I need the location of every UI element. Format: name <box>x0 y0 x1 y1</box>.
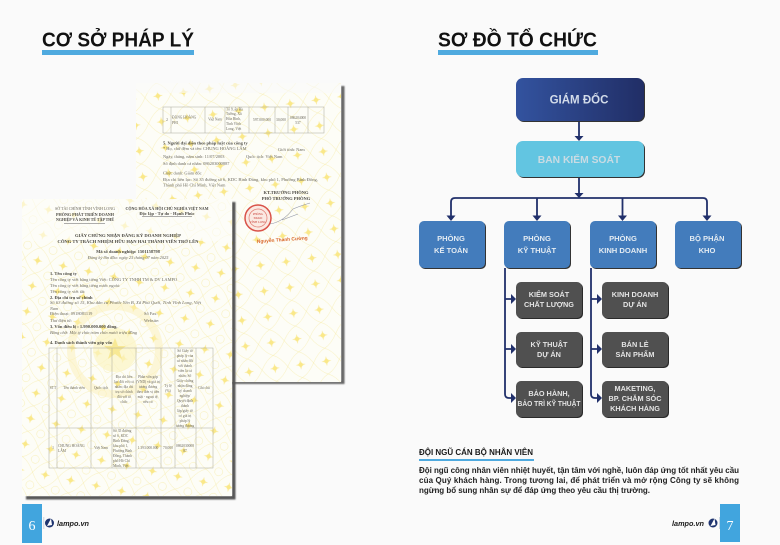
heading: ĐỘI NGŨ CÁN BỘ NHÂN VIÊN <box>419 448 534 461</box>
certificate member table: đối với tổ <box>117 394 131 399</box>
box: BAN KIỂM SOÁT: BAN KIỂM SOÁT <box>538 153 621 166</box>
back page signature block: PHÓ TRƯỞNG PHÒNG <box>262 196 311 201</box>
certificate title: GIẤY CHỨNG NHẬN ĐĂNG KÝ DOANH NGHIỆP <box>75 233 181 238</box>
box: KIỂM SOÁT CHẤT LƯỢNG: KIỂM SOÁT <box>529 290 570 299</box>
box: PHÒNG KINH DOANH <box>590 221 657 269</box>
certificate member table: 1.393.000.000 <box>138 446 159 450</box>
back page signature block: KT.TRƯỞNG PHÒNG <box>264 190 309 195</box>
certificate body text <box>49 271 202 345</box>
front page header: PHÒNG PHÁT TRIỂN DOANH <box>56 212 114 217</box>
certificate member table: tương đương <box>176 424 194 428</box>
footer left: logo and website: lampo.vn <box>57 519 89 528</box>
certificate member table: LÂM <box>58 448 67 453</box>
box: KIỂM SOÁT CHẤT LƯỢNG <box>516 282 583 319</box>
certificate member table: nhân; địa chỉ <box>115 385 133 389</box>
certificate member table: pháp lý <box>180 419 191 423</box>
certificate member table: Tên thành viên <box>63 386 85 390</box>
back page member table: ĐẶNG HOÀNG <box>172 114 197 120</box>
certificate member table: Đông, Thành <box>113 454 132 459</box>
certificate member table: theo đơn vị tiền <box>137 390 159 394</box>
certificate member table: Số Giấy tờ <box>177 349 193 353</box>
back page legal representative text: Thành phố Hồ Chí Minh, Việt Nam <box>163 182 226 188</box>
heading: ĐỘI NGŨ CÁN BỘ NHÂN VIÊN: ĐỘI NGŨ CÁN BỘ NHÂN VIÊN <box>419 448 533 457</box>
back page member table: PHI <box>172 121 179 125</box>
back page member table: 537 <box>295 121 301 125</box>
certificate member table: 70,000 <box>163 446 173 451</box>
box: BỘ PHẬN KHO <box>675 221 742 269</box>
certificate member table: số 6, KDC <box>113 434 129 439</box>
certificate title: Mã số doanh nghiệp: 1501158798 <box>96 249 161 254</box>
certificate member table: ký doanh <box>178 389 192 393</box>
box: KỸ THUẬT DỰ ÁN <box>516 332 583 368</box>
certificate member table: với thành <box>178 364 192 368</box>
certificate body text: Tên công ty viết bằng tiếng nước ngoài: <box>50 283 120 288</box>
certificate member table: Phần vốn góp <box>138 375 158 379</box>
title: CƠ SỞ PHÁP LÝ: CƠ SỞ PHÁP LÝ <box>42 28 195 52</box>
certificate title: Đăng ký lần đầu: ngày 25 tháng 07 năm 2025 <box>87 255 169 260</box>
front page header: CỘNG HÒA XÃ HỘI CHỦ NGHĨA VIỆT NAM <box>126 206 209 211</box>
certificate member table: thành <box>181 404 189 408</box>
text block: staff description <box>419 466 739 495</box>
certificate title: CÔNG TY TRÁCH NHIỆM HỮU HẠN HAI THÀNH VIÊN TRỞ LÊN <box>58 239 199 244</box>
certificate member table: Địa chỉ liên <box>116 375 133 379</box>
footer right: page number 7 <box>720 504 740 542</box>
certificate member table: CHUNG HOÀNG <box>58 443 85 448</box>
certificate member table: 1 <box>52 446 54 450</box>
box: GIÁM ĐỐC: GIÁM ĐỐC <box>550 92 608 106</box>
certificate member table: Số 35 đường <box>113 429 132 433</box>
box: MAKETING, BP. CHĂM SÓC KHÁCH HÀNG <box>602 381 669 418</box>
back page legal representative text: Giới tính: Nam <box>278 147 305 152</box>
title: SƠ ĐỒ TỔ CHỨC: SƠ ĐỒ TỔ CHỨC <box>438 28 597 52</box>
back page legal representative text: Chức danh: Giám đốc <box>163 170 202 176</box>
certificate body text: Tên công ty viết bằng tiếng Việt: CÔNG TY TNHH TM & DV LAMPO <box>50 277 177 282</box>
certificate body text: 1. Tên công ty <box>50 271 78 276</box>
footer right: website and logo: lampo.vn <box>672 519 704 528</box>
red stamp and signature: Nguyễn Thanh Cường <box>257 234 308 245</box>
certificate body text: Thư điện tử: <box>50 318 72 323</box>
certificate member table: 87 <box>183 449 187 453</box>
box: BÁN LẺ SẢN PHẨM <box>602 332 669 368</box>
front page header <box>55 206 209 224</box>
certificate member table: nhân; Số <box>179 374 192 378</box>
box: BÁN LẺ SẢN PHẨM: SẢN PHẨM <box>616 350 654 359</box>
box: GIÁM ĐỐC <box>516 78 645 122</box>
certificate member table: nếu có <box>143 400 153 404</box>
back page member table <box>163 106 324 133</box>
certificate member table: viên là cá <box>178 369 192 373</box>
back page member table: Tỉnh Vĩnh <box>226 122 241 126</box>
text block: staff description: Đội ngũ công nhân viên nhiệt huyết, tận tâm với nghề, luôn đáp ứng tốt nhất yêu cầu <box>419 466 739 475</box>
back page legal representative text: Quốc tịch: Việt Nam <box>246 154 283 159</box>
text block: staff description: của Quý khách hàng. Trong tương lai, để phát triển và mở rộng Công ty sẽ không <box>419 476 739 485</box>
connector: director to supervisory board <box>574 121 584 141</box>
certificate member table: tương đương <box>139 385 157 389</box>
certificate body text: Nam <box>49 306 58 311</box>
box: PHÒNG KỸ THUẬT <box>504 221 571 269</box>
national emblem sunburst <box>71 306 159 394</box>
certificate body text: 2. Địa chỉ trụ sở chính <box>50 295 93 300</box>
front page header: SỞ TÀI CHÍNH TỈNH VĨNH LONG <box>55 206 116 211</box>
box: BẢO HÀNH, BẢO TRÌ KỸ THUẬT <box>516 381 583 418</box>
back page member table: 30,000 <box>276 118 286 123</box>
certificate member table: STT <box>50 386 57 390</box>
red stamp and signature: PHÒNG <box>253 211 264 216</box>
box: PHÒNG KINH DOANH: PHÒNG <box>609 234 637 243</box>
box: KỸ THUẬT DỰ ÁN: DỰ ÁN <box>537 350 561 359</box>
back page legal representative text <box>163 140 318 188</box>
back page legal representative text: Ngày, tháng, năm sinh: 11/07/2003 <box>163 154 225 160</box>
certificate member table: lạc đối với cá <box>114 380 134 384</box>
back page legal representative text: Địa chỉ liên lạc: Số 35 đường số 6, KDC Bình Đăng, khu phố 1, Phường Bình Đông, <box>163 177 318 183</box>
box: MAKETING, BP. CHĂM SÓC KHÁCH HÀNG: KHÁCH HÀNG <box>610 404 660 413</box>
box: BỘ PHẬN KHO: BỘ PHẬN <box>689 234 725 243</box>
box: BAN KIỂM SOÁT <box>516 141 645 178</box>
back page member table: Việt Nam <box>208 118 222 122</box>
certificate member table: Quyết định <box>177 399 193 403</box>
box: PHÒNG KẾ TOÁN: PHÒNG <box>437 234 465 243</box>
back page member table: Tổ 9, ấp Bà <box>226 106 243 112</box>
certificate member table: phố Hồ Chí <box>113 459 130 463</box>
certificate member table: Tỷ lệ <box>164 384 172 388</box>
box: MAKETING, BP. CHĂM SÓC KHÁCH HÀNG: MAKETING, <box>615 384 655 393</box>
certificate member table: Phường Bình <box>113 449 132 453</box>
certificate member table: Ghi chú <box>198 386 210 390</box>
back page legal representative text: * Họ, chữ đệm và tên: CHUNG HOÀNG LÂM <box>163 146 247 152</box>
box: MAKETING, BP. CHĂM SÓC KHÁCH HÀNG: BP. CHĂM SÓC <box>609 394 662 403</box>
certificate member table: Bình Đăng, <box>113 439 130 444</box>
certificate member table: (VND) và giá trị <box>136 380 160 384</box>
certificate member table: Quốc tịch <box>94 386 108 390</box>
certificate body text: Bằng chữ: Một tỷ chín trăm chín mươi triệu đồng <box>50 330 138 335</box>
box: BẢO HÀNH, BẢO TRÌ KỸ THUẬT: BẢO HÀNH, <box>528 389 570 398</box>
certificate member table: (%) <box>165 389 171 393</box>
footer left: page number 6: 6 <box>28 519 36 534</box>
document: front page of business registration certificate <box>22 199 236 500</box>
certificate member table: khu phố 1, <box>113 444 128 449</box>
certificate member table: 0862030008 <box>176 444 194 448</box>
certificate body text: Tên công ty viết tắt: <box>50 289 85 294</box>
footer right: page number 7: 7 <box>726 519 734 534</box>
certificate body text: Số 63 đường số 15, Khu dân cư Phước Yên B, Xã Phú Quới, Tỉnh Vĩnh Long, Việt <box>50 300 202 306</box>
footer right: website and logo <box>672 517 720 529</box>
box: BỘ PHẬN KHO: KHO <box>699 246 716 255</box>
box: KINH DOANH DỰ ÁN <box>602 282 669 319</box>
certificate member table: nhận đăng <box>178 384 193 388</box>
certificate body text: Số Fax: <box>144 311 158 316</box>
front page header: NGHIỆP VÀ KINH TẾ TẬP THỂ <box>56 217 114 222</box>
certificate member table: chức <box>121 400 128 404</box>
red stamp and signature: ĐKKD <box>254 216 263 220</box>
certificate member table <box>49 348 213 469</box>
box: KIỂM SOÁT CHẤT LƯỢNG: CHẤT LƯỢNG <box>524 299 574 309</box>
connector: sales department branches <box>591 268 602 403</box>
certificate member table: trụ sở chính <box>115 390 133 394</box>
box: PHÒNG KẾ TOÁN <box>419 221 486 269</box>
red stamp and signature: VĨNH LONG <box>250 219 267 224</box>
footer left: page number 6 <box>22 504 42 543</box>
back page member table: 2 <box>166 118 168 122</box>
connector: supervisory board to departments <box>446 177 712 221</box>
back page member table: Hòa Bình, <box>226 117 241 122</box>
certificate member table: pháp lý của <box>177 354 194 358</box>
certificate body text: Điện thoại: 0918081119 <box>50 311 93 316</box>
box: KINH DOANH DỰ ÁN: DỰ ÁN <box>623 300 647 309</box>
certificate member table: Việt Nam <box>94 446 108 450</box>
box: PHÒNG KỸ THUẬT: PHÒNG <box>523 234 551 243</box>
box: PHÒNG KINH DOANH: KINH DOANH <box>599 246 647 255</box>
connector: technical department branches <box>505 268 516 403</box>
certificate body text: 4. Danh sách thành viên góp vốn <box>50 340 113 345</box>
certificate member table: Minh, Việt <box>113 464 128 469</box>
box: KỸ THUẬT DỰ ÁN: KỸ THUẬT <box>531 340 568 349</box>
box: PHÒNG KỸ THUẬT: KỸ THUẬT <box>518 246 557 255</box>
box: PHÒNG KẾ TOÁN: KẾ TOÁN <box>434 245 468 255</box>
certificate member table: mặt - ngoại tệ, <box>138 395 158 400</box>
back page member table: Long, Việt <box>226 127 241 132</box>
certificate member table: nghiệp/ <box>180 394 190 398</box>
certificate member table: cá nhân đối <box>177 359 193 363</box>
box: BẢO HÀNH, BẢO TRÌ KỸ THUẬT: BẢO TRÌ KỸ THUẬT <box>518 399 581 408</box>
front page header: Độc lập - Tự do - Hạnh Phúc <box>139 211 195 216</box>
document: back page of business registration certificate <box>136 83 344 384</box>
certificate member table: có giá trị <box>179 414 191 418</box>
certificate member table: lập/giấy tờ <box>177 409 193 413</box>
back page member table: Tường, Xã <box>226 112 242 117</box>
certificate title <box>58 233 199 260</box>
box: KINH DOANH DỰ ÁN: KINH DOANH <box>612 290 658 299</box>
box: BÁN LẺ SẢN PHẨM: BÁN LẺ <box>621 340 649 349</box>
certificate body text: 3. Vốn điều lệ : 1.990.000.000 đồng. <box>50 324 118 329</box>
back page legal representative text: 5. Người đại diện theo pháp luật của công ty <box>163 140 248 146</box>
certificate member table: Giấy chứng <box>177 379 194 383</box>
certificate body text: Website: <box>144 318 159 323</box>
back page member table: 597.000.000 <box>253 118 271 122</box>
footer left: logo and website <box>44 517 89 529</box>
text block: staff description: ngừng bổ sung nhân sự để đáp ứng theo yêu cầu thị trường. <box>419 486 650 495</box>
back page member table: 086204000 <box>290 116 306 120</box>
back page legal representative text: Số định danh cá nhân: 086203000887 <box>163 161 230 166</box>
red stamp and signature <box>245 203 310 245</box>
back page signature block <box>262 190 311 201</box>
org chart <box>419 78 742 418</box>
